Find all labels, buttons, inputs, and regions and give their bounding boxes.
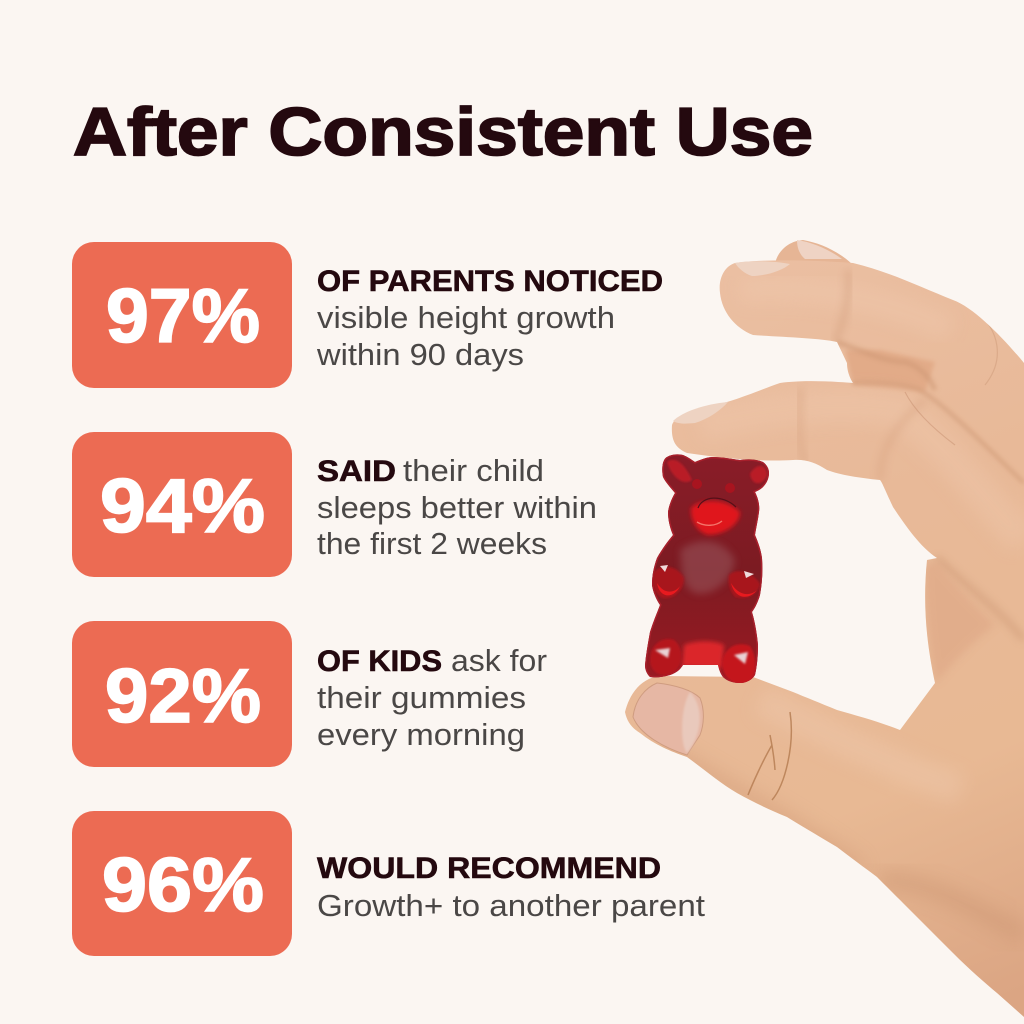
stat badge 94%: 94%	[100, 464, 265, 549]
stat row: 97%	[72, 242, 663, 388]
stat text 96%: WOULD RECOMMEND	[317, 852, 661, 885]
stat text 96%: Growth+ to another parent	[317, 888, 705, 923]
stat badge 97%: 97%	[106, 274, 260, 359]
back finger under the index	[845, 350, 935, 392]
bear snout	[691, 501, 740, 535]
upper finger light	[740, 289, 950, 330]
back fingertip	[775, 240, 852, 264]
stat text 94%: their child	[403, 453, 544, 488]
stat badge 96%	[72, 811, 292, 956]
knuckle folds	[835, 270, 848, 342]
stat badge 96%: 96%	[102, 843, 264, 928]
palm fold	[880, 880, 1024, 935]
thumb knuckle creases	[748, 712, 791, 800]
fingertip nails	[673, 261, 790, 424]
stat row: 96%	[72, 811, 705, 956]
stat text 92%: ask for	[451, 643, 547, 678]
pinching finger top edge	[853, 383, 1024, 483]
gummy bear	[645, 454, 769, 683]
stat row: 92%	[72, 621, 547, 767]
stat text 94%	[317, 453, 597, 561]
stat row: 94%	[72, 432, 597, 577]
stat text 97%: within 90 days	[316, 337, 524, 372]
stat text 92%: their gummies	[317, 680, 526, 715]
bear belly and feet	[650, 639, 755, 684]
stat badge 97%	[72, 242, 292, 388]
stat text 94%: sleeps better within	[317, 490, 597, 525]
stat text 94%: SAID	[317, 455, 396, 488]
hand silhouette and shading	[620, 255, 1024, 1024]
bear face details	[667, 460, 767, 525]
bear rim	[645, 454, 769, 683]
stat badge 92%: 92%	[105, 654, 261, 739]
thumb top light	[760, 700, 960, 790]
pinching finger body light	[1009, 524, 1018, 530]
stat text 97%	[316, 265, 663, 372]
hand holding gummy	[620, 240, 1024, 1024]
stat text 97%: visible height growth	[317, 300, 615, 335]
stat text 97%: OF PARENTS NOTICED	[317, 265, 663, 298]
stat text 96%	[317, 852, 705, 923]
bear body	[645, 454, 769, 683]
stat badge 94%	[72, 432, 292, 577]
stat text 92%: every morning	[317, 717, 525, 752]
stat text 92%: OF KIDS	[317, 645, 442, 678]
bear arms	[653, 565, 760, 598]
thumbnail	[633, 683, 703, 755]
thumb underside shadow	[664, 748, 858, 862]
stat text 94%: the first 2 weeks	[317, 526, 547, 561]
belly gloss	[680, 541, 735, 594]
palm crease under the pinching finger	[937, 558, 1024, 640]
stat badge 92%	[72, 621, 292, 767]
title: After Consistent Use	[73, 94, 813, 170]
stat text 92%	[317, 643, 547, 752]
index underside shadow	[837, 342, 935, 390]
